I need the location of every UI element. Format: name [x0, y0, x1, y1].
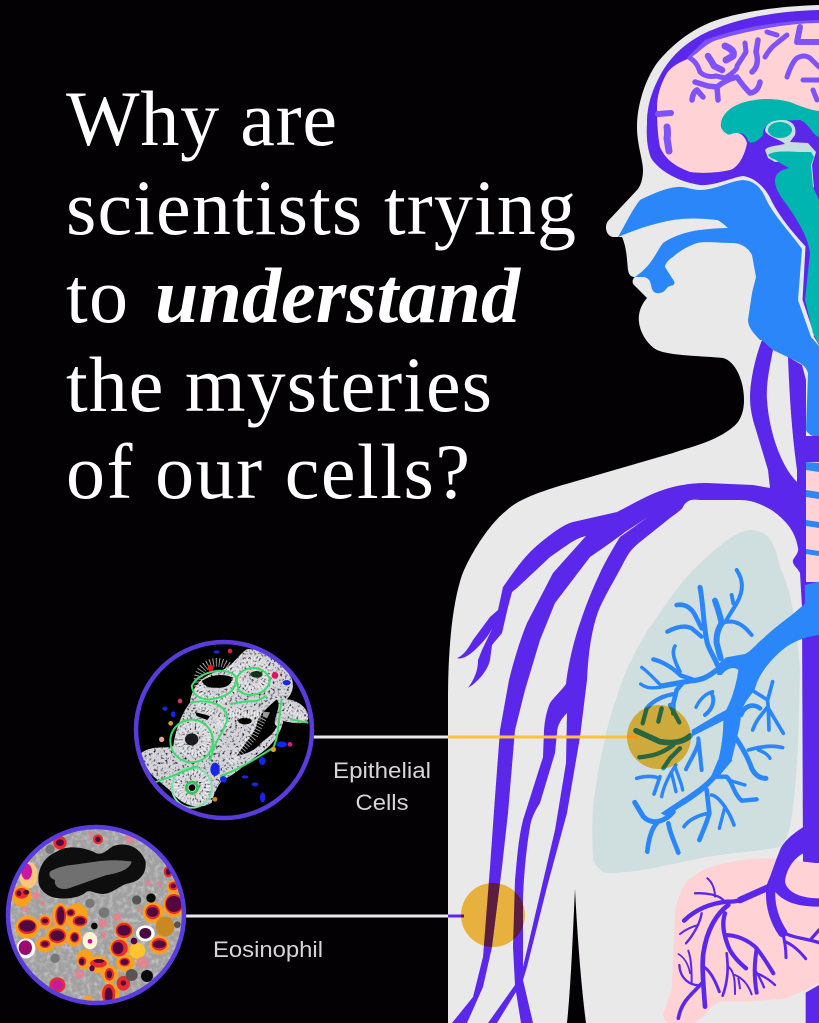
micrograph: epithelial cells: [136, 642, 312, 818]
label: Epithelial Cells: Cells: [356, 790, 408, 815]
title: Why are: [66, 75, 337, 162]
nucleus: [38, 844, 146, 899]
connector line: epithelial: [311, 736, 638, 738]
cells: [12, 862, 185, 1005]
dark granules: [45, 845, 181, 982]
label: Epithelial Cells: [333, 758, 431, 815]
lung: [592, 530, 800, 873]
brain folds: [658, 27, 819, 151]
human body anatomy: [448, 5, 819, 1023]
title: [66, 75, 576, 515]
brain lining: [647, 10, 819, 345]
brain: [657, 20, 819, 173]
title: to: [66, 252, 128, 339]
title: the mysteries: [66, 341, 492, 428]
bronchial tree: [635, 570, 819, 853]
highlight circle: arm vein: [461, 883, 525, 947]
title: scientists trying: [66, 164, 576, 251]
heart: [663, 827, 819, 1023]
body silhouette: [448, 5, 819, 1023]
pink granules: [22, 832, 162, 979]
aorta arch: [767, 827, 819, 907]
neck and arm veins: [452, 340, 819, 1023]
connector line: eosinophil: [184, 914, 464, 918]
heart vessels: [678, 878, 819, 1018]
upper bronchi: [641, 570, 819, 760]
lower bronchi: [635, 731, 783, 853]
trachea: [806, 462, 819, 582]
nasal airway: [618, 180, 819, 437]
title: of our cells?: [66, 428, 470, 515]
arm vein split gap: [523, 713, 567, 967]
aorta: [806, 985, 819, 1023]
highlight circle: lung: [627, 705, 691, 769]
corpus callosum: [721, 99, 819, 143]
airway gap: [743, 178, 813, 336]
micrograph: eosinophil: [6, 825, 186, 1005]
title: understand: [155, 252, 521, 339]
brainstem: [765, 120, 819, 345]
label: Eosinophil: Eosinophil: [213, 937, 323, 962]
degranulating cells: [17, 864, 155, 958]
label: Epithelial Cells: Epithelial: [333, 758, 431, 783]
